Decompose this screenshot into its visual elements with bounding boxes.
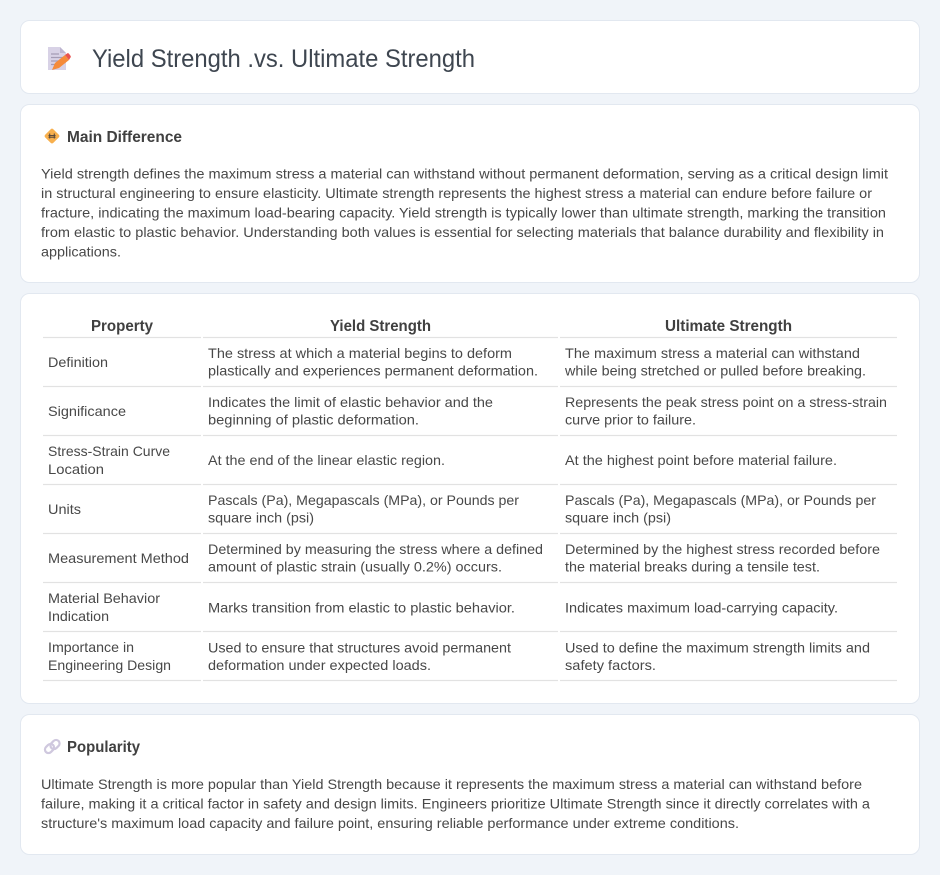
table row: material behavior indication — [43, 590, 897, 632]
text block: main difference paragraph: in structural engineering to ensure elasticity. Ultimate strength represents the highest stress a material can endure before failure or — [41, 185, 872, 201]
panel: header — [20, 20, 920, 94]
table row: units: Pascals (Pa), Megapascals (MPa), or Pounds per — [208, 492, 519, 508]
panel: comparison table — [20, 294, 920, 704]
table row: significance — [43, 394, 897, 436]
table row: importance in engineering design — [43, 639, 897, 680]
table row: significance: curve prior to failure. — [565, 412, 696, 428]
panel: main difference — [20, 104, 920, 282]
table row: measurement method: the material breaks during a tensile test. — [565, 558, 820, 574]
table row: units: Units — [48, 501, 81, 517]
table row: units: Pascals (Pa), Megapascals (MPa), or Pounds per — [565, 492, 876, 508]
table row: stress-strain curve location — [43, 443, 897, 484]
table row: units — [43, 492, 897, 534]
table row: stress-strain curve location: Stress-Strain Curve — [48, 443, 170, 459]
table row: material behavior indication: Marks transition from elastic to plastic behavior. — [208, 600, 515, 616]
table row: stress-strain curve location: At the end of the linear elastic region. — [208, 452, 445, 468]
heading: popularity: Popularity — [67, 739, 140, 756]
table row: importance in engineering design: Used to define the maximum strength limits and — [565, 640, 870, 656]
icon: chain link — [43, 738, 61, 755]
table row: importance in engineering design: deformation under expected loads. — [208, 657, 431, 673]
table row: measurement method: Determined by the highest stress recorded before — [565, 541, 880, 557]
text block: main difference paragraph: Yield strength defines the maximum stress a material can withstand without permanent deformation, serving as a critical design limit — [41, 166, 888, 182]
table row: stress-strain curve location: Location — [48, 461, 104, 477]
table row: significance: Represents the peak stress point on a stress-strain — [565, 394, 887, 410]
table row: definition: Definition — [48, 354, 108, 370]
table row: measurement method: amount of plastic strain (usually 0.2%) occurs. — [208, 558, 502, 574]
text block: main difference paragraph: applications. — [41, 244, 121, 260]
table header row: Ultimate Strength — [665, 318, 792, 335]
title: Yield Strength .vs. Ultimate Strength — [92, 45, 475, 73]
table row: definition: plastically and experiences permanent deformation. — [208, 362, 538, 378]
table row: definition: The stress at which a material begins to deform — [208, 345, 512, 361]
icon: memo with pencil — [48, 47, 71, 70]
text block: popularity paragraph — [41, 776, 870, 831]
text block: popularity paragraph: failure, making it a critical factor in safety and design limits. Engineers prioritize Ultimate Strength since it directly correlates with a — [41, 796, 870, 812]
table row: units: square inch (psi) — [565, 510, 671, 526]
icon: warning diamond — [44, 128, 60, 144]
table row: measurement method: Determined by measuring the stress where a defined — [208, 541, 543, 557]
table row: importance in engineering design: Used to ensure that structures avoid permanent — [208, 640, 511, 656]
table row: measurement method — [43, 541, 897, 582]
table row: significance: Significance — [48, 403, 126, 419]
text block: popularity paragraph: structure's maximum load capacity and failure point, ensuring reliable performance under extreme conditions. — [41, 815, 739, 831]
table row: stress-strain curve location: At the highest point before material failure. — [565, 452, 837, 468]
text block: main difference paragraph: fracture, indicating the maximum load-bearing capacity. Yield strength is typically lower than ultimate strength, marking the transition — [41, 204, 886, 220]
heading: main difference: Main Difference — [67, 129, 182, 146]
text block: popularity paragraph: Ultimate Strength is more popular than Yield Strength because it represents the maximum stress a material can withstand before — [41, 776, 862, 792]
table row: material behavior indication: Indicates maximum load-carrying capacity. — [565, 600, 838, 616]
panel: popularity — [20, 714, 920, 854]
table row: definition — [43, 345, 897, 386]
table row: definition: The maximum stress a material can withstand — [565, 345, 860, 361]
table row: significance: Indicates the limit of elastic behavior and the — [208, 394, 493, 410]
table row: importance in engineering design: Importance in — [48, 639, 134, 655]
table row: definition: while being stretched or pulled before breaking. — [564, 362, 866, 378]
table row: importance in engineering design: Engineering Design — [48, 657, 171, 673]
table header row: Yield Strength — [330, 318, 431, 335]
table row: significance: beginning of plastic deformation. — [208, 412, 419, 428]
table row: importance in engineering design: safety factors. — [565, 657, 656, 673]
text block: main difference paragraph — [41, 166, 888, 260]
table row: units: square inch (psi) — [208, 510, 314, 526]
table row: material behavior indication: Indication — [48, 608, 109, 624]
text block: main difference paragraph: from elastic to plastic behavior. Understanding both values is essential for selecting materials that balance durability and flexibility in — [41, 224, 884, 240]
table row: material behavior indication: Material Behavior — [48, 590, 160, 606]
table header row: Property — [91, 318, 153, 335]
table row: measurement method: Measurement Method — [48, 550, 189, 566]
table header row — [43, 318, 897, 338]
